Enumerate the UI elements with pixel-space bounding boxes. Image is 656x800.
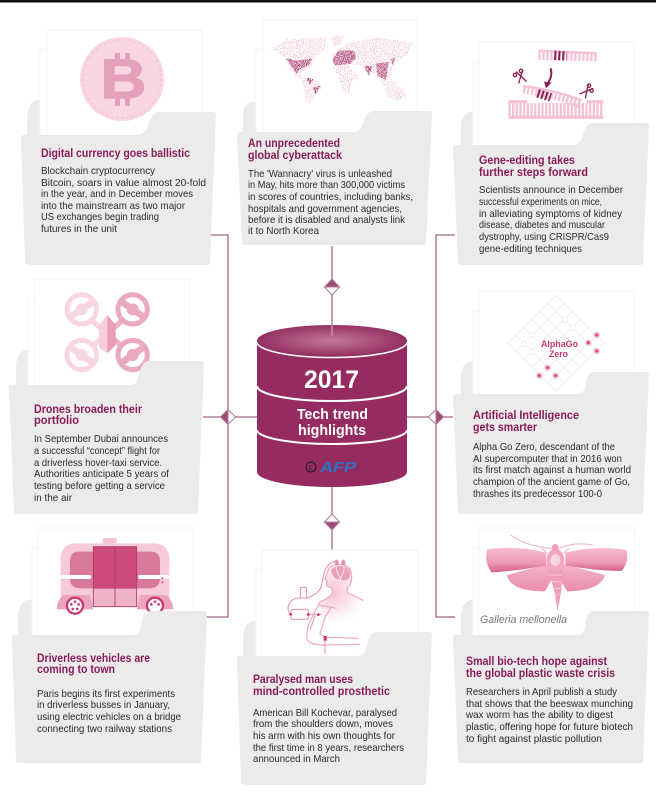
body text: his arm with his own thoughts for — [253, 731, 396, 742]
body text: in driverless busses in January, — [37, 700, 170, 711]
body text: its first match against a human world — [473, 465, 631, 476]
body text: to fight against plastic pollution — [466, 734, 602, 745]
body text: disease, diabetes and muscular — [479, 220, 605, 231]
body text: in the year, and in December moves — [41, 189, 193, 200]
icon label: AlphaGo — [541, 339, 578, 349]
body text: hospitals and government agencies, — [248, 204, 402, 215]
heading: the global plastic waste crisis — [466, 668, 615, 680]
title text: Tech trend — [297, 406, 368, 423]
icon label: Zero — [549, 349, 568, 359]
species caption: Galleria mellonella — [480, 614, 567, 626]
heading — [248, 138, 343, 162]
body text: using electric vehicles on a bridge — [37, 712, 181, 723]
panel: artificial intelligence — [453, 291, 649, 514]
body text: in May, hits more than 300,000 victims — [248, 180, 405, 191]
heading: Gene-editing takes — [479, 155, 575, 167]
body text: from the shoulders down, moves — [253, 719, 393, 730]
connector diamond: bottom — [324, 514, 340, 530]
icon: driverless shuttle — [57, 538, 173, 614]
body text: Authorities anticipate 5 years of — [34, 469, 169, 480]
icon label — [541, 339, 578, 359]
heading — [479, 155, 588, 179]
body text: gene-editing techniques — [479, 244, 582, 255]
body text: American Bill Kochevar, paralysed — [253, 708, 397, 719]
icon: drone — [67, 295, 147, 370]
body text: futures in the unit — [41, 224, 117, 235]
heading: Artificial Intelligence — [473, 410, 579, 422]
body text: a successful “concept” flight for — [34, 446, 160, 457]
body text: AI supercomputer that in 2016 won — [473, 454, 622, 465]
icon: bitcoin coin: B — [100, 47, 146, 110]
title year: 2017 — [304, 366, 359, 394]
body text: Researchers in April publish a study — [466, 687, 618, 698]
body text — [253, 708, 404, 765]
heading: global cyberattack — [248, 150, 343, 162]
connector diamond: top — [324, 279, 340, 295]
connector diamond: left — [220, 410, 236, 424]
icon: wax moth — [486, 535, 627, 611]
body text: that shows that the beeswax munching — [466, 699, 633, 710]
heading: Digital currency goes ballistic — [41, 148, 191, 160]
icon: Go board — [508, 295, 604, 391]
body text: Paris begins its first experiments — [37, 689, 175, 700]
panel: centre database cylinder — [257, 325, 407, 487]
connector lines — [203, 235, 455, 617]
panel: bio-tech — [453, 528, 649, 763]
heading: mind-controlled prosthetic — [253, 686, 391, 698]
heading: An unprecedented — [248, 138, 340, 150]
body text — [473, 442, 631, 500]
body text: champion of the ancient game of Go, — [473, 477, 630, 488]
icon: world map of infections — [269, 35, 413, 104]
panel: gene editing — [453, 42, 649, 265]
body text: Alpha Go Zero, descendant of the — [473, 442, 615, 453]
icon: CRISPR DNA strands and scissors — [508, 51, 603, 117]
heading: portfolio — [34, 415, 79, 427]
body text: in scores of countries, including banks, — [248, 192, 413, 203]
icon: man with brain implant and arm — [288, 560, 363, 653]
body text: wax worm has the ability to digest — [465, 710, 613, 721]
body text: testing before getting a service — [34, 481, 165, 492]
body text: into the mainstream as two major — [41, 201, 186, 212]
heading — [253, 674, 391, 698]
AFP credit: c — [308, 463, 312, 472]
body text: in alleviating symptoms of kidney — [479, 209, 623, 220]
body text: Scientists announce in December — [479, 185, 624, 196]
panel: driverless vehicles — [12, 528, 207, 763]
heading — [37, 653, 150, 676]
body text: before it is disabled and analysts link — [248, 215, 406, 226]
heading: Driverless vehicles are — [37, 653, 150, 665]
body text — [34, 434, 169, 504]
body text: in the air — [34, 493, 73, 504]
body text: plastic, offering hope for future biotech — [466, 722, 633, 733]
title text: highlights — [298, 422, 366, 439]
title text — [297, 406, 368, 439]
body text: connecting two railway stations — [37, 724, 172, 735]
connector diamond: right — [428, 410, 444, 424]
heading: Small bio-tech hope against — [466, 656, 607, 668]
heading: Paralysed man uses — [253, 674, 353, 686]
body text: Blockchain cryptocurrency — [41, 166, 156, 177]
panel: drones — [9, 279, 204, 514]
body text — [41, 166, 206, 235]
body text — [248, 169, 413, 237]
body text: US exchanges begin trading — [41, 212, 159, 223]
icon: bitcoin coin — [80, 37, 164, 121]
body text — [37, 689, 181, 735]
panel: digital currency — [21, 30, 216, 265]
heading — [473, 410, 579, 434]
heading: further steps forward — [479, 167, 588, 179]
body text: announced in March — [253, 754, 340, 765]
heading: gets smarter — [473, 422, 537, 434]
top black bar — [0, 0, 656, 2]
heading: Drones broaden their — [34, 404, 142, 416]
body text — [479, 185, 624, 255]
body text: successful experiments on mice, — [479, 197, 602, 208]
body text — [465, 687, 633, 745]
heading — [466, 656, 615, 680]
heading — [34, 404, 142, 427]
body text: thrashes its predecessor 100-0 — [473, 489, 602, 500]
body text: a driverless hover-taxi service. — [34, 458, 162, 469]
body text: dystrophy, using CRISPR/Cas9 — [479, 232, 609, 243]
panel: cyberattack — [237, 20, 432, 245]
AFP credit — [306, 459, 357, 476]
body text: Bitcoin, soars in value almost 20-fold — [41, 178, 206, 189]
AFP credit: AFP — [319, 459, 357, 476]
heading: coming to town — [37, 664, 115, 676]
body text: it to North Korea — [248, 226, 319, 237]
panel: prosthetic — [237, 550, 432, 785]
body text: In September Dubai announces — [34, 434, 168, 445]
body text: The 'Wannacry' virus is unleashed — [248, 169, 392, 180]
body text: the first time in 8 years, researchers — [253, 743, 404, 754]
